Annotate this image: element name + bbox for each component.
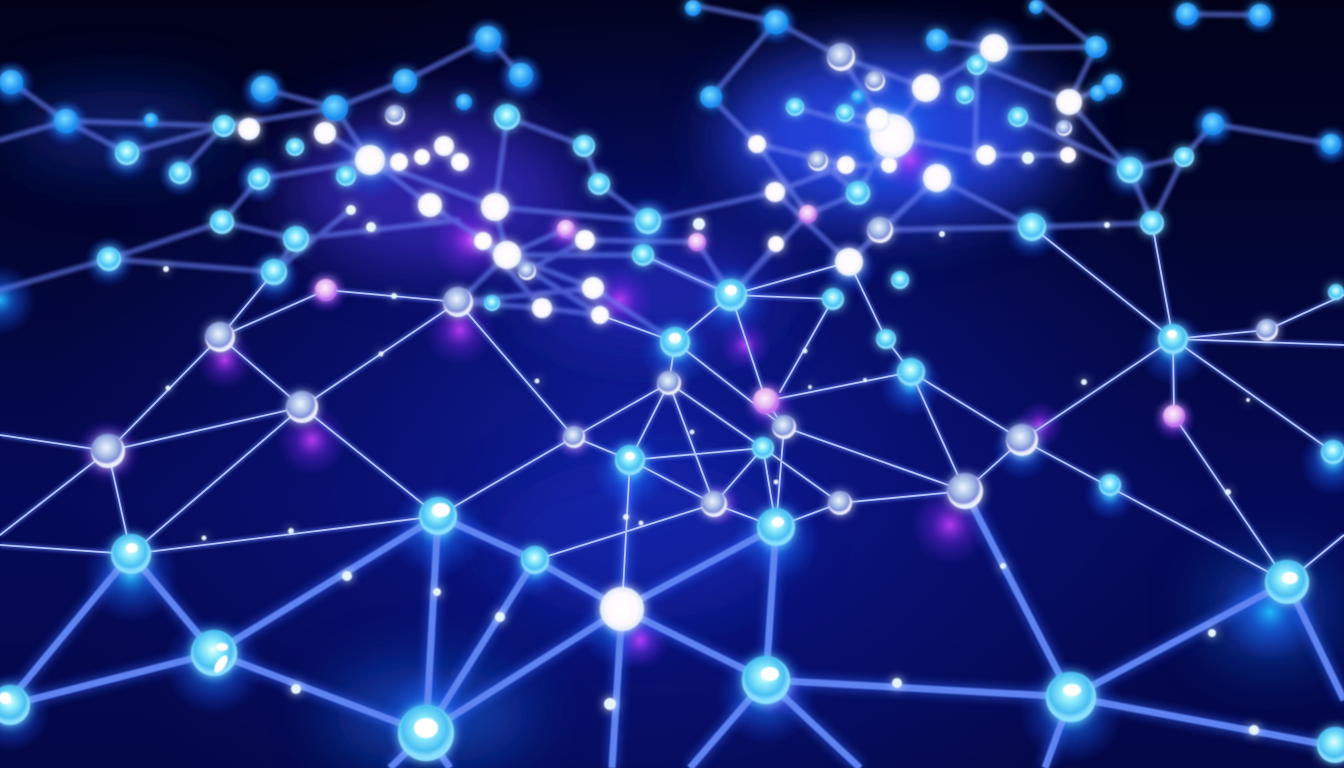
connections: background web <box>0 0 1331 342</box>
sphere highlights <box>0 285 1298 738</box>
connections: foreground <box>10 491 1344 768</box>
connections: mid-ground glow <box>0 223 1344 609</box>
connections: mid-ground <box>0 223 1344 609</box>
nodes: upper left cluster <box>0 26 706 324</box>
foreground connection glow <box>10 460 1344 768</box>
nodes: upper right cluster <box>685 0 1341 252</box>
nodes: foreground spheres <box>0 210 1344 763</box>
connection pulses <box>163 152 1259 735</box>
